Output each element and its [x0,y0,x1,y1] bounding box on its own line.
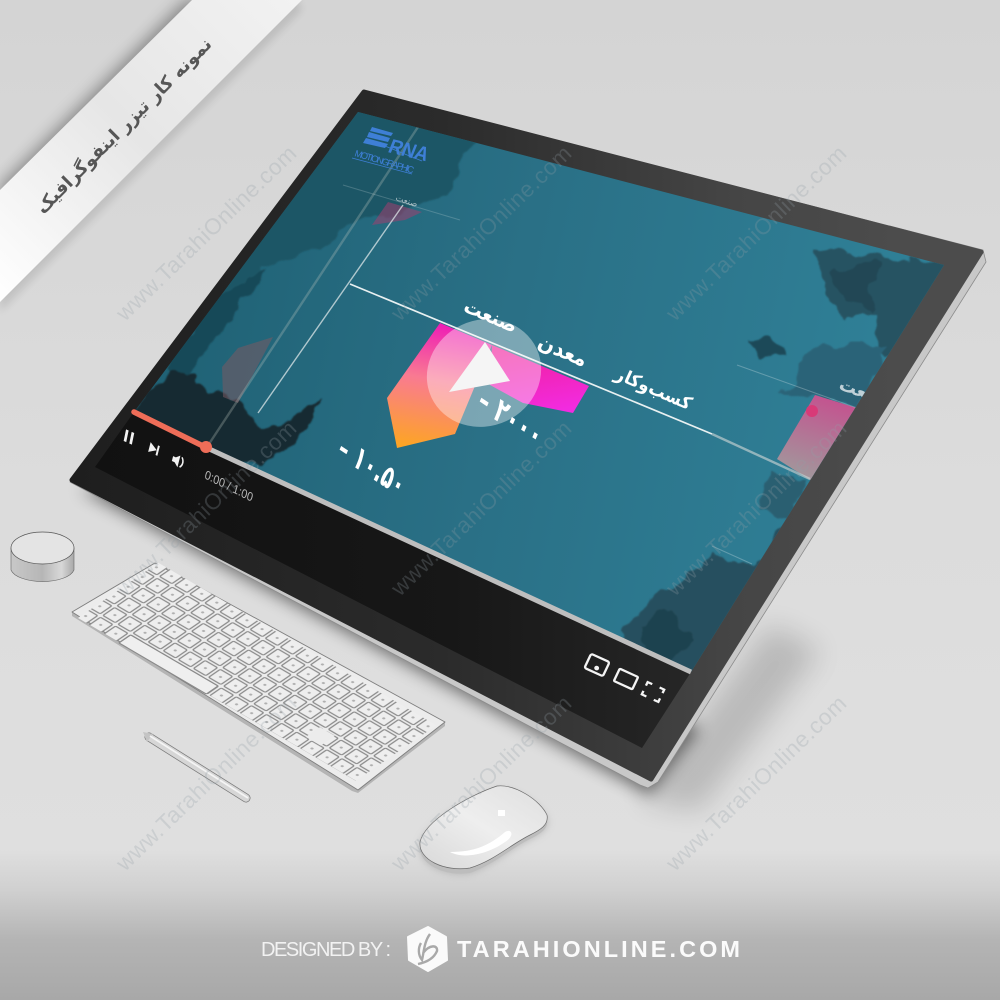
control panel: video player bar [95,412,691,748]
keyboard keys [77,563,436,781]
seek handle [200,441,212,453]
icon: volume [171,453,184,469]
dial: surface puck [11,532,74,582]
watermarks: www.TarahiOnline.com [385,415,577,601]
screen texture: paint blotches [125,100,950,690]
space bar [119,635,218,694]
value: industry: – ۱۰.۵۰ [333,429,411,504]
logo: hexagon [408,927,447,971]
icon: pause [124,429,134,445]
label: mining: معدن [534,329,592,372]
watermarks: www.TarahiOnline.com [385,140,577,326]
logo: IRNA motion graphic [352,127,432,175]
axis line fade [712,434,810,479]
logo wordmark: RNA [385,136,432,166]
dial top [11,532,74,564]
monitor shadow on desk [80,470,820,810]
axis line [350,284,712,434]
keyboard top [72,563,445,790]
mouse logo [498,810,505,816]
label: industry: صنعت [460,294,522,338]
mouse [420,786,547,874]
label: business: کسب‌وکار [611,364,696,415]
seek bar track [205,447,691,672]
watermarks [110,140,852,876]
time label: 0:00 / 1:00 [203,468,255,505]
watermarks: www.TarahiOnline.com [660,140,852,326]
play button circle [409,300,559,446]
watermarks: www.TarahiOnline.com [110,690,302,876]
brand name: TARAHIONLINE.COM [457,936,740,962]
faded chart fragments [205,127,892,564]
ribbon text: نمونه کار تیزر اینفوگرافیک [31,33,216,218]
stylus pen [143,732,248,798]
watermarks: www.TarahiOnline.com [660,690,852,876]
watermarks: www.TarahiOnline.com [660,415,852,601]
icon: theater mode [614,669,638,689]
panel background [95,412,691,748]
pen tip [143,732,153,742]
icon: next [148,442,160,456]
footer: designed by [261,927,740,971]
keyboard [72,563,445,793]
mouse rim [420,790,547,874]
bar: mining [490,345,589,413]
screen: teal video frame [136,112,944,672]
faded chart fragments: صنعت [836,375,892,412]
watermarks: www.TarahiOnline.com [385,690,577,876]
icon: fullscreen [642,682,664,702]
watermarks: www.TarahiOnline.com [110,415,302,601]
faded chart fragments: صنعت [394,193,419,210]
arrow key gap [306,727,335,746]
bar: industry [387,323,492,448]
designed by text: DESIGNED BY : [261,939,391,961]
monitor [70,92,986,788]
monitor silver edge [70,92,986,788]
logo bars [363,127,393,148]
mouse top [420,786,547,869]
icon: picture in picture [584,654,610,676]
mouse gloss [450,831,511,855]
chart: main bars and axis [333,284,810,504]
seek bar progress [134,412,205,447]
watermarks: www.TarahiOnline.com [110,140,302,326]
value: mining: – ۲۰۰۰ [473,379,549,455]
ribbon: corner banner [0,0,302,312]
play triangle [449,342,510,392]
logo subtitle: MOTIONGRAPHIC [353,148,416,175]
keyboard thickness [72,563,445,793]
monitor bezel [72,92,981,779]
